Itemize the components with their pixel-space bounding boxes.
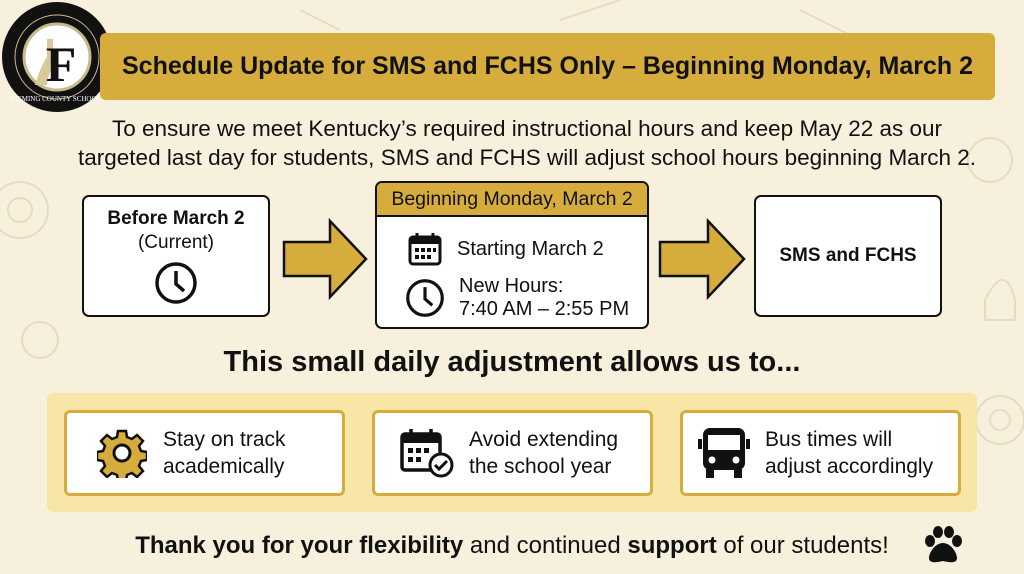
calendar row	[408, 233, 604, 266]
hours row: New Hours:	[459, 275, 563, 297]
card: stay on track	[64, 410, 345, 496]
calendar row: Starting March 2	[457, 238, 604, 260]
box: SMS and FCHS	[754, 195, 942, 317]
heading: This small daily adjustment allows us to...	[224, 346, 800, 378]
arrow 2	[658, 218, 746, 300]
card: avoid extending: Avoid extending	[469, 428, 618, 451]
icon: paw	[925, 526, 962, 562]
hours row: 7:40 AM – 2:55 PM	[459, 298, 629, 320]
intro text: To ensure we meet Kentucky’s required instructional hours and keep May 22 as our	[112, 116, 942, 141]
card: avoid extending	[372, 410, 653, 496]
card: bus times: Bus times will	[765, 428, 892, 451]
logo: F	[46, 36, 76, 92]
box: before	[82, 195, 270, 317]
header: Beginning Monday, March 2	[391, 188, 633, 210]
footer text: Thank you for your flexibility and continued support of our students!	[135, 532, 889, 559]
card: avoid extending: the school year	[469, 455, 611, 478]
panel: benefits	[47, 393, 977, 512]
intro text	[78, 116, 976, 170]
card: stay on track: Stay on track	[163, 428, 286, 451]
logo: FLEMING COUNTY SCHOOLS	[9, 95, 105, 103]
arrow 1	[282, 218, 368, 300]
box: SMS and FCHS: SMS and FCHS	[779, 245, 917, 266]
card: bus times: adjust accordingly	[765, 455, 933, 478]
box: before: (Current)	[138, 232, 214, 253]
logo	[2, 2, 112, 112]
box: before: Before March 2	[107, 208, 245, 229]
header	[377, 183, 647, 217]
icon: clock	[155, 262, 197, 304]
card: stay on track: academically	[163, 455, 284, 478]
box: new schedule	[375, 181, 649, 329]
intro text: targeted last day for students, SMS and FCHS will adjust school hours beginning March 2.	[78, 145, 976, 170]
title bar: Schedule Update for SMS and FCHS Only – Beginning Monday, March 2	[122, 52, 973, 80]
hours row	[406, 275, 629, 320]
title bar	[100, 33, 995, 100]
card: bus times	[680, 410, 961, 496]
